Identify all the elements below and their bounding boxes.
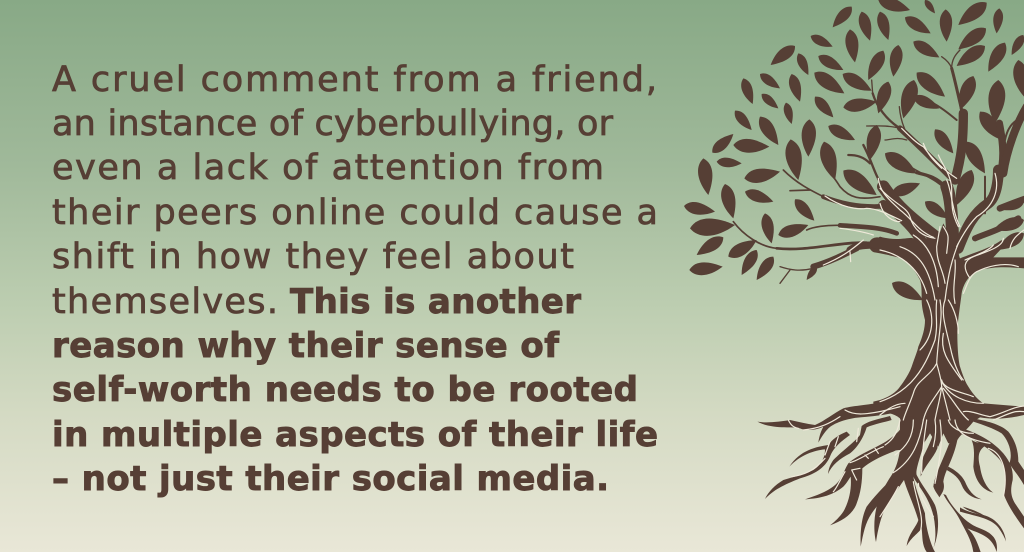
body text block: – not just their social media. bbox=[52, 459, 609, 499]
illustration: tree with roots bbox=[683, 0, 1024, 552]
tree leaves bbox=[683, 0, 1024, 306]
roots: lower and right side bbox=[873, 417, 1024, 552]
veins: left roots bbox=[788, 407, 900, 492]
veins: crown junction bbox=[880, 180, 1024, 303]
body text block: an instance of cyberbullying, or bbox=[52, 104, 614, 144]
body text block: shift in how they feel about bbox=[52, 237, 574, 277]
roots: left side bbox=[757, 398, 903, 547]
body text block: This is another bbox=[290, 282, 581, 322]
body text block: themselves. bbox=[52, 282, 278, 322]
body text block: self-worth needs to be rooted bbox=[52, 370, 638, 410]
veins: lower roots bbox=[880, 420, 1005, 537]
body text block: reason why their sense of bbox=[52, 326, 560, 366]
veins: trunk bbox=[880, 300, 1024, 420]
white veins bbox=[788, 128, 1024, 537]
body text block bbox=[52, 60, 658, 499]
veins: upper branches bbox=[823, 128, 997, 265]
tree branches bbox=[733, 50, 1024, 283]
body text block: in multiple aspects of their life bbox=[52, 415, 658, 455]
body text block: their peers online could cause a bbox=[52, 193, 658, 233]
trunk bbox=[867, 223, 1024, 447]
body text block: A cruel comment from a friend, bbox=[52, 60, 657, 100]
body text block: even a lack of attention from bbox=[52, 148, 604, 188]
